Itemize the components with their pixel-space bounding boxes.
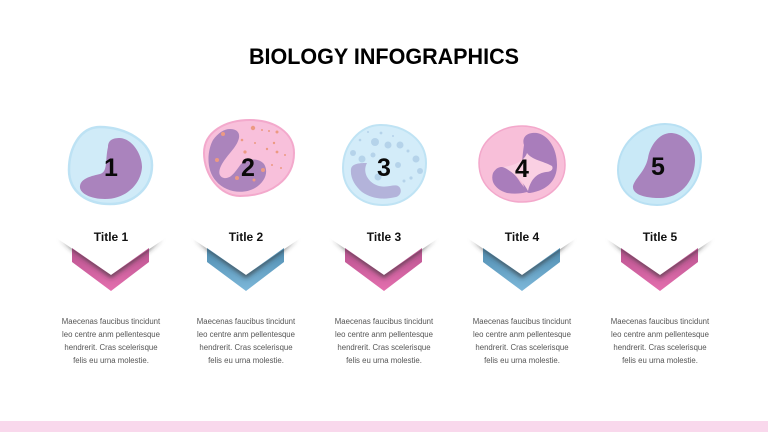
text block 3: hendrerit. Cras scelerisque <box>337 343 431 352</box>
text block 4: hendrerit. Cras scelerisque <box>475 343 569 352</box>
number 5: 5 <box>651 153 665 181</box>
text block 3: felis eu urna molestie. <box>346 356 422 365</box>
heading: title 1: Title 1 <box>94 230 129 244</box>
text block 1: felis eu urna molestie. <box>73 356 149 365</box>
text block 5: felis eu urna molestie. <box>622 356 698 365</box>
chevron 2 <box>195 238 297 291</box>
heading: title 2: Title 2 <box>229 230 264 244</box>
text block 5: leo centre anm pellentesque <box>611 330 709 339</box>
heading: title 3: Title 3 <box>367 230 402 244</box>
number 1: 1 <box>104 154 118 182</box>
text block 1 <box>62 317 161 365</box>
cell 5 <box>618 124 701 205</box>
text block 4 <box>473 317 572 365</box>
text block 2: hendrerit. Cras scelerisque <box>199 343 293 352</box>
chevron 3 <box>333 238 435 291</box>
cell 2 <box>204 120 294 196</box>
number 3: 3 <box>377 154 391 182</box>
cell 4 <box>479 126 565 202</box>
text block 5: Maecenas faucibus tincidunt <box>611 317 710 326</box>
heading: title 5: Title 5 <box>643 230 678 244</box>
chevron 4 <box>471 238 573 291</box>
text block 2: Maecenas faucibus tincidunt <box>197 317 296 326</box>
number 4: 4 <box>515 155 529 183</box>
heading: title 4: Title 4 <box>505 230 540 244</box>
text block 2 <box>197 317 296 365</box>
column 5 <box>609 230 711 365</box>
footer band <box>0 421 768 432</box>
title: BIOLOGY INFOGRAPHICS <box>249 44 519 69</box>
text block 3 <box>335 317 434 365</box>
text block 1: leo centre anm pellentesque <box>62 330 160 339</box>
text block 3: Maecenas faucibus tincidunt <box>335 317 434 326</box>
cell 3 <box>343 125 426 205</box>
chevron 1 <box>60 238 162 291</box>
text block 5 <box>611 317 710 365</box>
text block 3: leo centre anm pellentesque <box>335 330 433 339</box>
nucleus lobes <box>492 133 557 194</box>
text block 1: Maecenas faucibus tincidunt <box>62 317 161 326</box>
column 3 <box>333 230 435 365</box>
text block 5: hendrerit. Cras scelerisque <box>613 343 707 352</box>
column 1 <box>60 230 162 365</box>
column 4 <box>471 230 573 365</box>
text block 2: felis eu urna molestie. <box>208 356 284 365</box>
text block 4: felis eu urna molestie. <box>484 356 560 365</box>
text block 4: Maecenas faucibus tincidunt <box>473 317 572 326</box>
number 2: 2 <box>241 154 255 182</box>
text block 4: leo centre anm pellentesque <box>473 330 571 339</box>
text block 1: hendrerit. Cras scelerisque <box>64 343 158 352</box>
chevron 5 <box>609 238 711 291</box>
pale centre <box>503 153 553 191</box>
cell 1 <box>69 127 152 204</box>
text block 2: leo centre anm pellentesque <box>197 330 295 339</box>
column 2 <box>195 230 297 365</box>
